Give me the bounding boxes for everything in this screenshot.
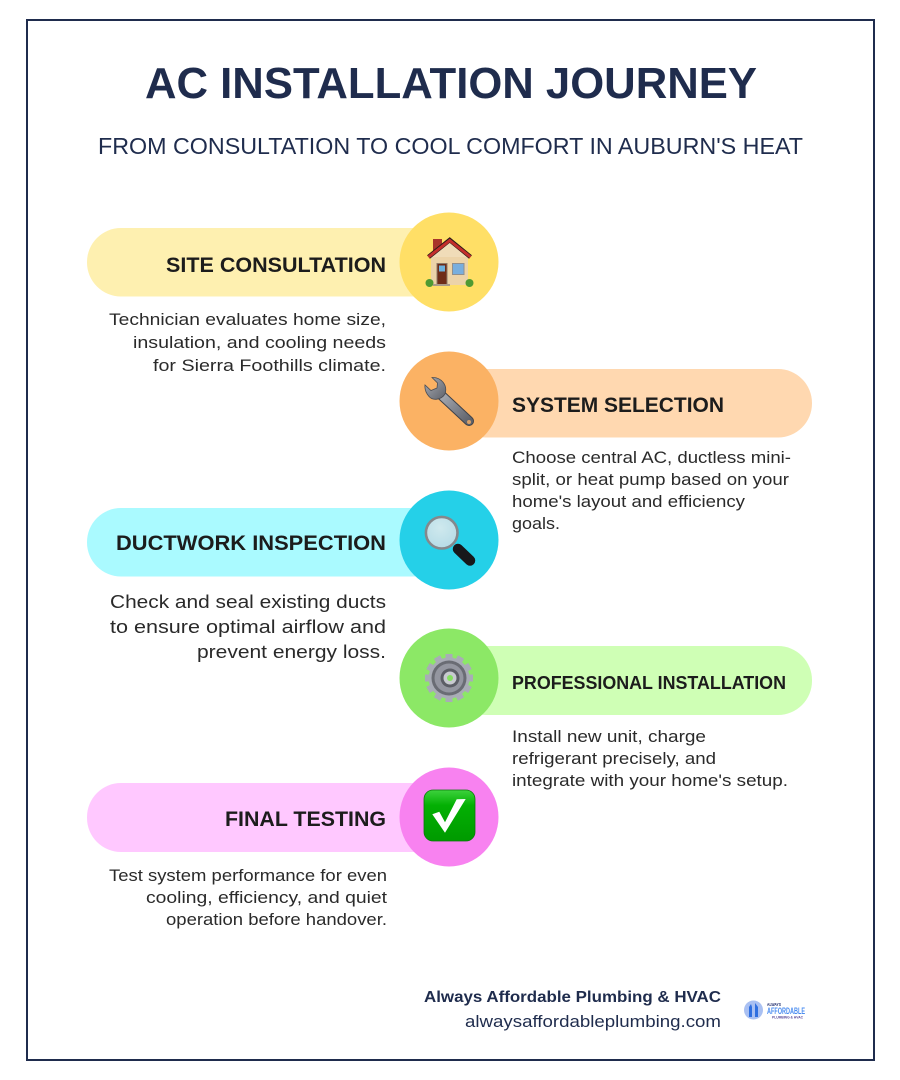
- heading: PROFESSIONAL INSTALLATION: [512, 673, 786, 693]
- step 1: site consultation: [87, 212, 498, 375]
- title: AC INSTALLATION JOURNEY: [145, 59, 757, 108]
- logo: AFFORDABLE: [767, 1006, 805, 1016]
- pill: site consultation: [87, 228, 447, 296]
- description: Test system performance for even: [109, 866, 387, 885]
- footer company name: Always Affordable Plumbing & HVAC: [424, 989, 721, 1006]
- subtitle: FROM CONSULTATION TO COOL COMFORT IN AUBURN'S HEAT: [98, 133, 803, 159]
- logo: PLUMBING & HVAC: [772, 1014, 803, 1020]
- description: Technician evaluates home size,: [109, 310, 386, 329]
- step 2: system selection: [400, 352, 812, 533]
- icon circle: gear: [400, 628, 498, 728]
- description: for Sierra Foothills climate.: [153, 356, 386, 375]
- description: integrate with your home's setup.: [512, 771, 788, 790]
- description: cooling, efficiency, and quiet: [146, 888, 387, 907]
- pill: ductwork inspection: [87, 508, 447, 576]
- footer website: alwaysaffordableplumbing.com: [465, 1013, 721, 1031]
- description: operation before handover.: [166, 910, 387, 929]
- pill: professional installation: [452, 646, 812, 715]
- description: Check and seal existing ducts: [110, 591, 386, 612]
- icon circle: wrench: [400, 352, 498, 450]
- logo: [744, 1000, 805, 1020]
- description: [109, 310, 386, 375]
- pill: final testing: [87, 783, 447, 852]
- description: goals.: [512, 514, 560, 533]
- description: home's layout and efficiency: [512, 492, 746, 511]
- description: Choose central AC, ductless mini-: [512, 448, 791, 467]
- description: to ensure optimal airflow and: [110, 616, 386, 637]
- heading: FINAL TESTING: [225, 808, 386, 831]
- description: [512, 448, 791, 533]
- icon circle: magnifying glass: [400, 490, 498, 590]
- step 3: ductwork inspection: [87, 490, 498, 662]
- step 4: professional installation: [400, 628, 812, 790]
- pill: system selection: [452, 369, 812, 438]
- heading: SYSTEM SELECTION: [512, 394, 724, 417]
- step 5: final testing: [87, 768, 498, 929]
- heading: DUCTWORK INSPECTION: [116, 532, 386, 555]
- icon circle: check mark: [400, 768, 498, 866]
- heading: SITE CONSULTATION: [166, 254, 386, 277]
- description: [109, 866, 387, 929]
- logo: ALWAYS: [767, 1002, 781, 1007]
- description: refrigerant precisely, and: [512, 749, 716, 768]
- description: insulation, and cooling needs: [133, 333, 386, 352]
- description: split, or heat pump based on your: [512, 470, 789, 489]
- description: [110, 591, 386, 662]
- icon circle: house: [400, 212, 498, 312]
- description: prevent energy loss.: [197, 641, 386, 662]
- description: [512, 727, 788, 790]
- description: Install new unit, charge: [512, 727, 706, 746]
